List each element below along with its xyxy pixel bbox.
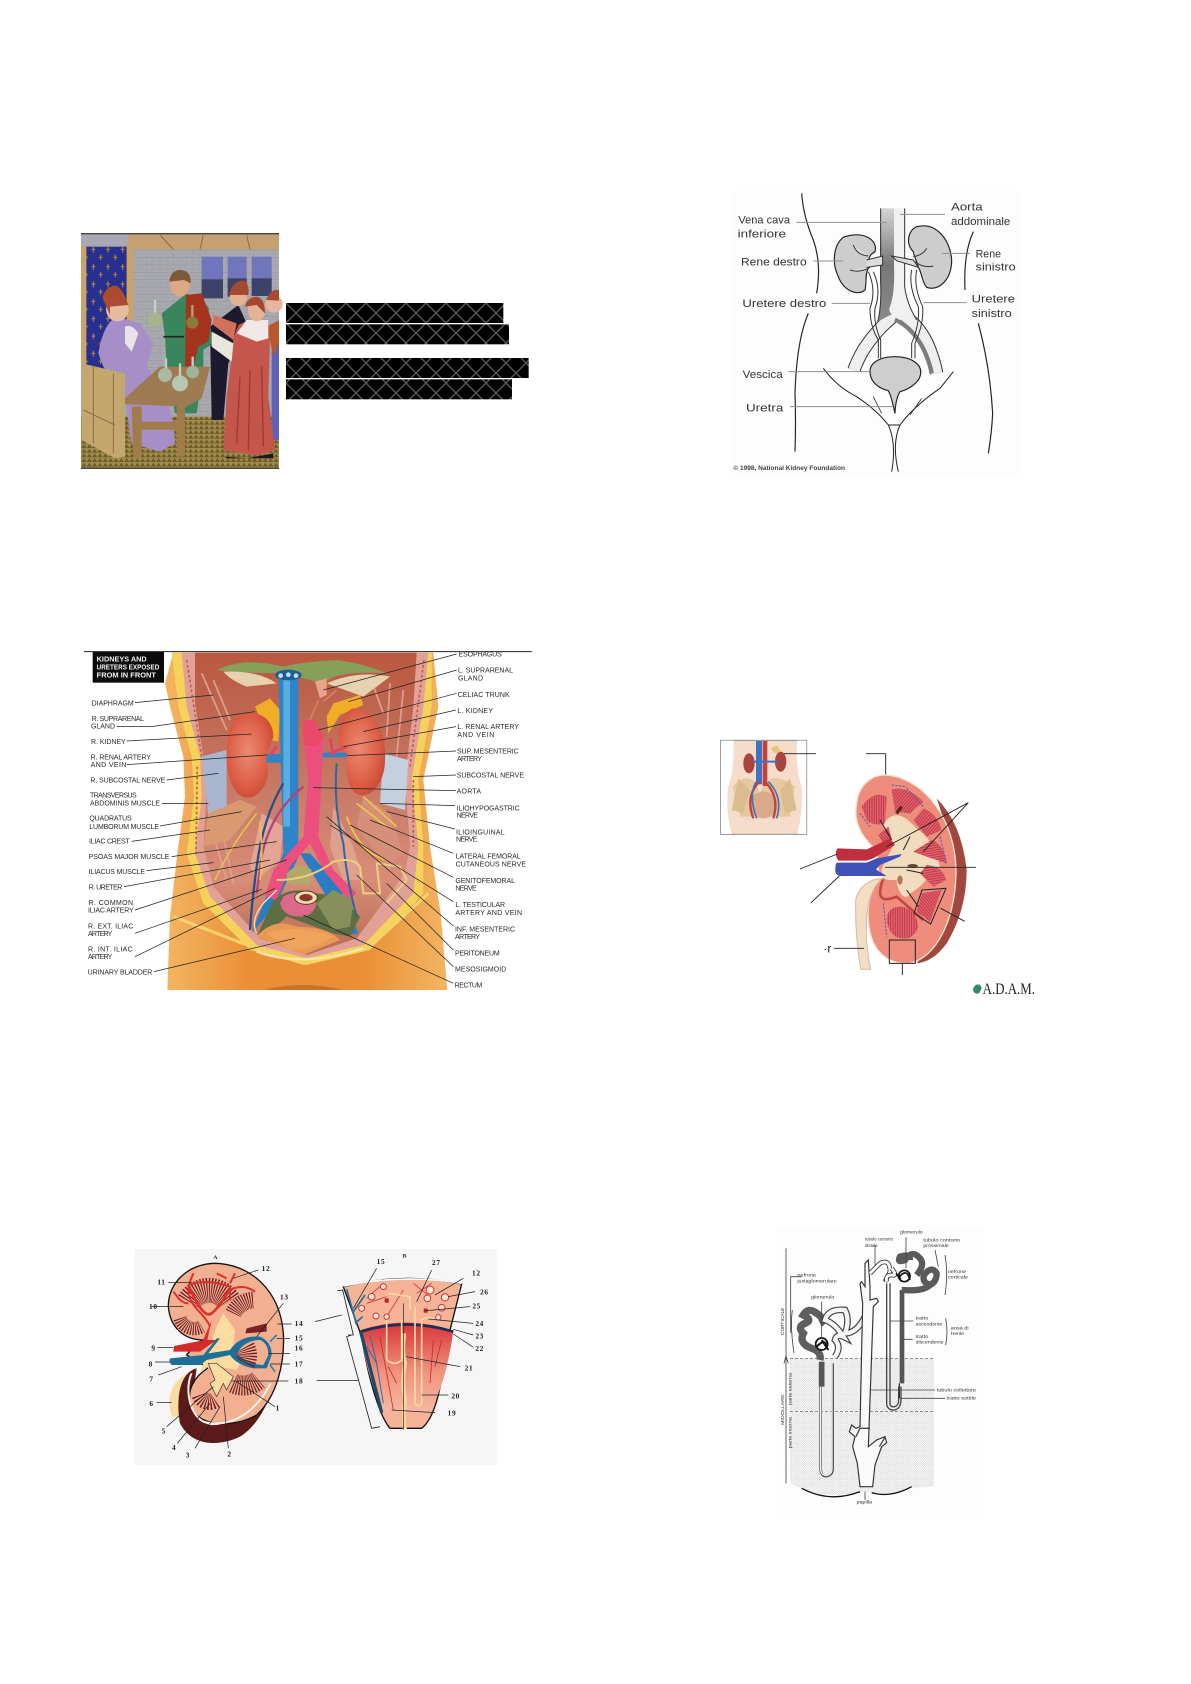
left labels: ILIAC ARTERY	[88, 908, 134, 915]
right labels: ARTERY AND VEIN	[455, 910, 522, 917]
header box	[93, 652, 164, 683]
right labels: NERVE	[455, 885, 477, 892]
right labels: SUBCOSTAL NERVE	[457, 773, 524, 780]
letter headings and numbers: 25	[472, 1302, 481, 1311]
right labels: NERVE	[457, 813, 478, 820]
letter headings and numbers: 14	[295, 1319, 303, 1328]
labels: glomerulo	[900, 1230, 924, 1235]
bottom papilla curve	[802, 1487, 912, 1497]
right labels: SUP. MESENTERIC	[457, 749, 519, 756]
labels: nefrone	[797, 1272, 817, 1277]
left labels: QUADRATUS	[89, 816, 132, 823]
labels: corticale	[948, 1275, 969, 1280]
labels: CORTICALE	[780, 1307, 785, 1335]
right labels: ARTERY	[457, 756, 482, 763]
labels: tubulo collettore	[937, 1388, 977, 1393]
header box: URETERS EXPOSED	[97, 665, 159, 672]
left labels: ARTERY	[88, 931, 113, 938]
letter headings and numbers: 13	[280, 1292, 289, 1301]
highlighted lobe boxes	[889, 888, 946, 963]
labels: inferiore	[738, 229, 786, 241]
left labels: ABDOMINIS MUSCLE	[90, 801, 160, 808]
letter headings and numbers: B	[403, 1253, 407, 1259]
right labels	[455, 651, 526, 990]
letter headings and numbers: 11	[157, 1278, 166, 1287]
letter headings and numbers: 19	[448, 1408, 456, 1417]
labels: nefrone	[948, 1269, 967, 1274]
figure B: pyramid wedge	[337, 1278, 462, 1429]
right labels: ARTERY	[455, 934, 480, 941]
faint image background	[733, 190, 1020, 477]
letter headings and numbers: 7	[149, 1375, 154, 1384]
right labels: L. TESTICULAR	[455, 902, 505, 909]
right labels: MESOSIGMOID	[455, 967, 507, 974]
labels: sinistro	[972, 308, 1012, 320]
letter headings and numbers: 5	[162, 1426, 166, 1435]
letter headings and numbers: 8	[149, 1360, 153, 1369]
left labels	[88, 700, 170, 976]
labels: juxtaglomerulare	[796, 1279, 838, 1284]
letter headings and numbers: 15	[377, 1257, 385, 1266]
leader lines	[152, 1268, 475, 1448]
right labels: INF. MESENTERIC	[455, 926, 515, 933]
header box: KIDNEYS AND	[97, 657, 147, 664]
figure A: kidney	[168, 1263, 284, 1443]
labels: tubulo contorto	[923, 1238, 961, 1243]
letter headings and numbers: 6	[149, 1399, 154, 1408]
letter headings and numbers: 18	[295, 1377, 303, 1386]
panel: nephron diagram	[777, 1227, 983, 1513]
left labels: R. EXT. ILIAC	[88, 923, 134, 930]
labels: Aorta	[951, 202, 984, 214]
labels: Uretere	[972, 294, 1015, 306]
labels: papilla	[857, 1499, 873, 1504]
left labels: ILIACUS MUSCLE	[89, 869, 145, 876]
renal vein	[835, 854, 902, 876]
background	[134, 1249, 497, 1465]
labels: © 1998, National Kidney Foundation	[733, 465, 845, 472]
cortical nephron tubules	[886, 1254, 937, 1410]
header box: FROM IN FRONT	[97, 673, 157, 680]
top rule	[84, 650, 532, 653]
labels: tratto	[916, 1334, 929, 1339]
left labels: AND VEIN	[91, 762, 127, 769]
left labels: URINARY BLADDER	[88, 969, 153, 976]
labels: ascendente	[916, 1321, 943, 1326]
letter headings and numbers: 12	[472, 1269, 481, 1278]
letter headings and numbers: 12	[262, 1264, 270, 1273]
letter headings and numbers: 4	[172, 1443, 176, 1452]
letter headings and numbers: 24	[475, 1319, 484, 1328]
right labels: L. KIDNEY	[457, 708, 493, 715]
labels: Rene	[976, 248, 1001, 260]
renal artery	[836, 838, 895, 861]
right labels: ESOPHAGUS	[459, 651, 502, 658]
labels: Vescica	[743, 369, 784, 381]
left labels: R. SUPRARENAL	[92, 716, 144, 723]
redacted title bars	[286, 303, 529, 399]
labels: parte esterna	[788, 1372, 793, 1405]
right labels: LATERAL FEMORAL	[456, 854, 521, 861]
painting: physicians examining urine flasks	[81, 233, 283, 468]
labels: prossimale	[923, 1243, 950, 1248]
anatomical abdomen illustration	[165, 653, 447, 990]
labels: tratto sottile	[947, 1395, 977, 1400]
right labels: GENITOFEMORAL	[455, 878, 515, 885]
ADAM logo: A.D.A.M.	[983, 981, 1035, 998]
letter headings and numbers: 23	[475, 1332, 484, 1341]
labels: tratto	[916, 1315, 929, 1320]
right labels: RECTUM	[455, 983, 483, 990]
stray label fragment: ·r	[823, 942, 831, 956]
labels	[780, 1230, 977, 1504]
labels: Henle	[951, 1331, 965, 1336]
ureter	[856, 878, 883, 969]
labels: addominale	[951, 216, 1010, 228]
letter headings and numbers: A	[213, 1255, 218, 1261]
labels: sinistro	[976, 262, 1016, 274]
labels: distale	[865, 1243, 878, 1248]
juxtaglomerular nephron tubules	[800, 1310, 865, 1476]
letter headings and numbers: 16	[295, 1343, 303, 1352]
labels	[733, 202, 1016, 472]
urinary system drawing	[788, 193, 993, 472]
labels: parte interna	[788, 1416, 793, 1448]
letter headings and numbers: 21	[465, 1363, 473, 1372]
labels: discendente	[916, 1340, 945, 1345]
left labels: R. SUBCOSTAL NERVE	[90, 778, 166, 785]
letter headings and numbers: 17	[295, 1359, 303, 1368]
left labels: R. KIDNEY	[91, 739, 126, 746]
labels: ansa di	[951, 1326, 969, 1331]
left labels: R. INT. ILIAC	[88, 947, 133, 954]
cortical and medullary axis lines	[784, 1237, 947, 1500]
boundary lines	[790, 1358, 934, 1411]
labels: Rene destro	[741, 256, 807, 268]
right labels: CUTANEOUS NERVE	[456, 862, 526, 869]
left labels: R. URETER	[89, 884, 123, 891]
left labels: ILIAC CREST	[89, 839, 130, 846]
right labels: GLAND	[458, 676, 483, 683]
panel: medieval painting and redacted text	[81, 233, 529, 468]
right labels: AORTA	[457, 789, 481, 796]
right labels: ILIOHYPOGASTRIC	[457, 805, 520, 812]
left labels: LUMBORUM MUSCLE	[89, 824, 159, 831]
right labels: PERITONEUM	[455, 951, 500, 958]
left labels: R. COMMON	[89, 900, 133, 907]
letter headings and numbers: 26	[480, 1287, 489, 1296]
left labels: DIAPHRAGM	[92, 700, 134, 707]
right labels: L. RENAL ARTERY	[457, 724, 519, 731]
right labels: AND VEIN	[457, 732, 495, 739]
panel: ADAM kidney cross-section	[721, 740, 1035, 998]
letter headings and numbers: 15	[295, 1333, 303, 1342]
leader lines	[117, 654, 457, 983]
letter headings and numbers	[149, 1253, 489, 1460]
right labels: L. SUPRARENAL	[458, 668, 513, 675]
labels: Vena cava	[738, 214, 791, 226]
left labels: ARTERY	[88, 954, 113, 961]
label lines	[784, 754, 976, 975]
labels: MIDOLLARE	[780, 1394, 785, 1425]
letter headings and numbers: 10	[149, 1302, 158, 1311]
panel: numbered kidney section and medullary pyramid	[134, 1249, 497, 1465]
left labels: GLAND	[91, 724, 115, 731]
letter headings and numbers: 20	[451, 1391, 460, 1400]
letter headings and numbers: 3	[186, 1451, 190, 1460]
panel: urinary system diagram (Italian labels)	[733, 190, 1020, 477]
letter headings and numbers: 27	[432, 1258, 441, 1267]
right labels: CELIAC TRUNK	[458, 692, 510, 699]
collecting duct	[849, 1260, 890, 1487]
labels: Uretra	[746, 402, 784, 414]
kidney capsule shadow	[917, 798, 967, 963]
left labels: TRANSVERSUS	[90, 793, 137, 800]
letter headings and numbers: 2	[227, 1450, 232, 1459]
panel: kidneys and ureters exposed from in front	[84, 651, 532, 990]
left labels: R. RENAL ARTERY	[91, 754, 151, 761]
kidney cross-section	[856, 775, 956, 963]
letter headings and numbers: 1	[276, 1404, 280, 1413]
labels: glomerulo	[811, 1295, 835, 1300]
labels: tubulo contorto	[865, 1237, 894, 1242]
faint background	[777, 1227, 983, 1513]
right labels: ILIOINGUINAL	[456, 829, 505, 836]
letter headings and numbers: 9	[151, 1343, 156, 1352]
right labels: NERVE	[456, 837, 478, 844]
inset: body with kidneys	[721, 740, 807, 834]
left labels: PSOAS MAJOR MUSCLE	[89, 854, 170, 861]
labels: Uretere destro	[742, 298, 826, 310]
dotted medulla region	[790, 1358, 934, 1495]
letter headings and numbers: 22	[475, 1344, 484, 1353]
